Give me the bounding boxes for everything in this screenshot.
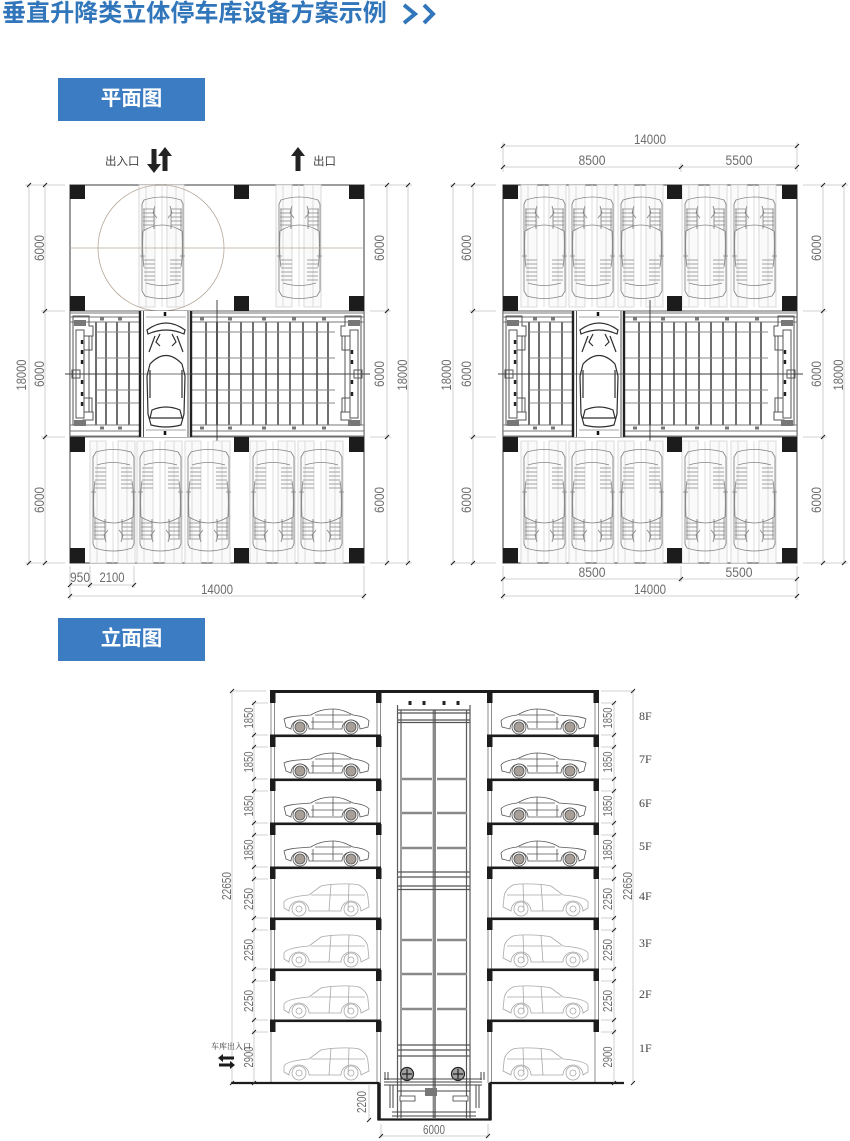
outer walls xyxy=(503,185,797,563)
exit arrow xyxy=(291,147,305,171)
column stubs xyxy=(270,692,599,1032)
dimensions left side: 18000 xyxy=(438,359,454,390)
dimensions left side xyxy=(13,183,65,565)
roof and floor slabs xyxy=(270,690,599,1022)
columns thin lines xyxy=(271,692,598,1083)
panel: elevation section xyxy=(211,689,652,1138)
dimensions left side: 6000 xyxy=(458,361,474,387)
floor labels: 7F xyxy=(639,752,652,766)
dimensions left: 22650 xyxy=(220,872,234,900)
floor labels xyxy=(639,709,652,1055)
turning circle xyxy=(70,185,364,311)
dimensions top: 5500 xyxy=(726,152,753,168)
dimensions left side: 6000 xyxy=(31,361,47,387)
lift carriage plan xyxy=(498,300,803,443)
sedans right bays xyxy=(501,709,586,866)
dimensions top xyxy=(501,131,799,172)
dimensions bottom: 8500 xyxy=(578,564,606,580)
floor labels: 6F xyxy=(639,796,652,810)
dimensions left: 2900 xyxy=(242,1046,256,1068)
dimensions right: 2250 xyxy=(601,990,615,1012)
dimensions bottom xyxy=(501,564,799,600)
dimensions left side: 6000 xyxy=(458,487,474,513)
dimensions bottom: 14000 xyxy=(634,581,666,597)
dimensions top: 8500 xyxy=(578,152,606,168)
bottom row parked cars xyxy=(521,441,777,563)
dimensions left xyxy=(220,689,268,1085)
dimensions left: 1850 xyxy=(242,707,256,728)
dimensions right side: 6000 xyxy=(808,361,824,387)
bottom row parked cars xyxy=(90,441,344,563)
top row parked cars xyxy=(521,185,777,307)
dimensions left: 2250 xyxy=(242,888,256,910)
dimensions left side: 6000 xyxy=(31,487,47,513)
dimensions right side: 6000 xyxy=(808,487,824,513)
dimensions right side xyxy=(803,183,848,565)
dimensions left: 1850 xyxy=(242,795,256,816)
dimensions left: 1850 xyxy=(242,751,256,772)
dimensions right side: 6000 xyxy=(371,235,387,261)
floor labels: 5F xyxy=(639,839,652,853)
top row entry and exit cars xyxy=(139,185,322,307)
dimensions right: 22650 xyxy=(621,872,635,900)
heading: plan view: 平面图 xyxy=(101,87,162,110)
outer walls xyxy=(70,185,364,563)
structural columns xyxy=(503,185,797,563)
dimensions bottom: 14000 xyxy=(201,581,233,597)
heading: plan view xyxy=(58,78,205,121)
floor labels: 1F xyxy=(639,1041,652,1055)
dimensions right side: 18000 xyxy=(394,359,410,390)
panel: right floor plan xyxy=(438,131,848,600)
dimensions right xyxy=(601,689,635,1085)
sedans left bays xyxy=(284,709,369,866)
dimensions right: 1850 xyxy=(601,707,615,728)
heading: elevation view: 立面图 xyxy=(101,627,162,650)
structural columns xyxy=(70,185,364,563)
dimensions left: 1850 xyxy=(242,839,256,860)
dimensions bottom: 950 xyxy=(70,569,90,585)
entrance arrows xyxy=(147,147,172,173)
floor labels: 4F xyxy=(639,889,652,903)
dimensions right side xyxy=(370,183,412,565)
icon: entrance arrows xyxy=(218,1054,235,1069)
dimensions bottom xyxy=(68,566,366,600)
dimensions left side: 6000 xyxy=(458,235,474,261)
dimensions right: 2250 xyxy=(601,939,615,961)
floor labels: 2F xyxy=(639,987,652,1001)
dimensions pit: 2200 xyxy=(355,1091,369,1113)
lift drive machinery xyxy=(384,1068,484,1116)
dimensions right: 1850 xyxy=(601,751,615,772)
garage entrance label: 车库出入口 xyxy=(211,1041,251,1051)
SUVs right bays xyxy=(503,884,588,1080)
dimensions right side: 18000 xyxy=(830,359,846,390)
entrance label: 出入口 xyxy=(105,154,140,168)
dimensions right: 1850 xyxy=(601,795,615,816)
dimensions right: 2250 xyxy=(601,888,615,910)
dimensions right: 1850 xyxy=(601,839,615,860)
dimensions right side: 6000 xyxy=(371,361,387,387)
dimensions right: 2900 xyxy=(601,1046,615,1068)
dimensions pit xyxy=(355,1085,490,1138)
SUVs left bays xyxy=(284,884,369,1080)
heading: elevation view xyxy=(58,618,205,661)
dimensions left side: 6000 xyxy=(31,235,47,261)
dimensions left: 2250 xyxy=(242,939,256,961)
dimensions left: 2250 xyxy=(242,990,256,1012)
exit label: 出口 xyxy=(313,154,336,168)
lift shaft frame xyxy=(398,701,470,1118)
dimensions left side xyxy=(438,183,496,565)
icon: title double chevron xyxy=(404,5,433,23)
dimensions top: 14000 xyxy=(634,131,666,147)
dimensions bottom: 5500 xyxy=(726,564,753,580)
floor labels: 8F xyxy=(639,709,652,723)
ground line and pit xyxy=(231,1083,624,1120)
dimensions pit: 6000 xyxy=(423,1123,445,1137)
dimensions left side: 18000 xyxy=(13,359,29,390)
panel: left floor plan xyxy=(13,147,412,600)
dimensions bottom: 2100 xyxy=(100,569,125,585)
floor labels: 3F xyxy=(639,936,652,950)
dimensions right side: 6000 xyxy=(371,487,387,513)
dimensions right side: 6000 xyxy=(808,235,824,261)
lift carriage plan xyxy=(65,300,370,443)
title: 垂直升降类立体停车库设备方案示例 xyxy=(2,0,387,27)
